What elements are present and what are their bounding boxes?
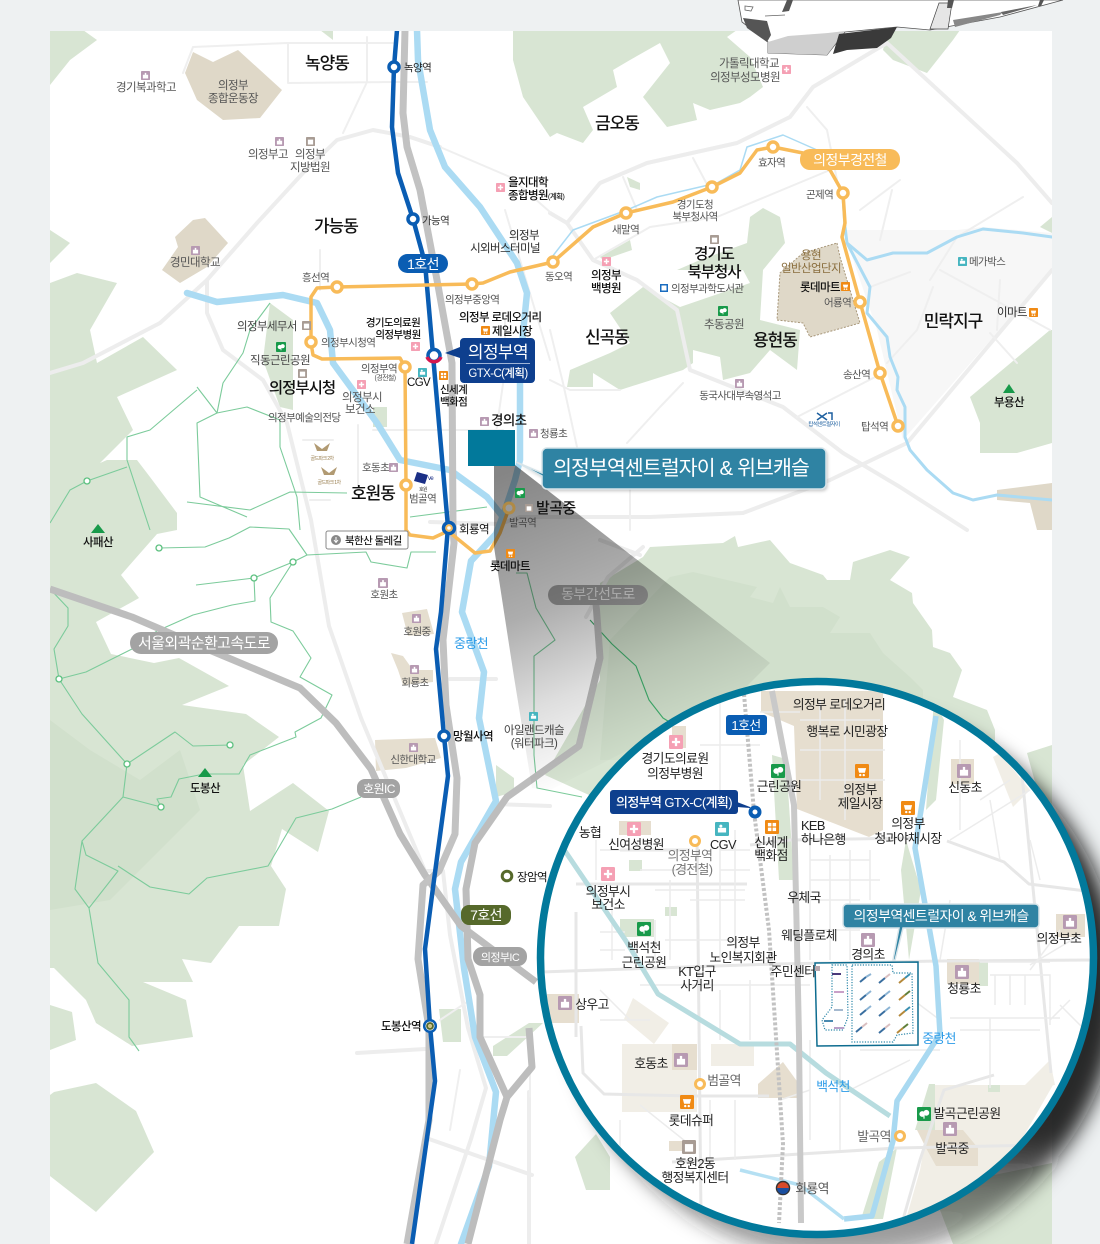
Megabox: 메가박스: [969, 256, 1006, 268]
district labels: 용현동: [753, 331, 797, 350]
highway: Dongbu expressway: [466, 603, 600, 1244]
Shinsegae department store: 백화점: [440, 395, 467, 408]
Lotte Castle 2: [311, 443, 334, 462]
Eulji hospital: [496, 175, 565, 202]
Uijeongbu IC badge: 의정부IC: [481, 951, 520, 964]
Fruit market: 의정부: [891, 816, 926, 831]
Hyoja station: 효자역: [758, 157, 785, 169]
trail junction markers: [56, 478, 296, 810]
light rail badge: [800, 149, 900, 170]
Jangam station label: 장암역: [517, 871, 547, 884]
hiking trails: [50, 303, 692, 1051]
Sangwoo high: [558, 996, 610, 1012]
Kyungmin University: [170, 246, 220, 269]
school and court: 의정부: [295, 148, 325, 161]
local roads: [183, 37, 1050, 1130]
Shinyeoseong hospital: 신여성병원: [608, 837, 664, 852]
darker forest shading: [50, 572, 923, 910]
Hoeryong station: [776, 1181, 829, 1196]
Shinsegae: 신세계: [754, 835, 788, 850]
Dong-o station: 동오역: [545, 271, 572, 283]
Jungnangcheon: 중랑천: [922, 1031, 956, 1046]
Line 7 badge: [461, 905, 511, 925]
district labels: [269, 54, 983, 503]
provincial office station: [672, 198, 718, 223]
Eoryong station: 어룡역: [824, 297, 851, 309]
Dobongsan mountain: 도봉산: [190, 782, 221, 795]
Buyongsan: [994, 384, 1025, 409]
Island castle: [504, 712, 564, 750]
Howon IC badge: [357, 779, 400, 798]
KT junction: [678, 964, 717, 993]
Shinsegae: 백화점: [754, 848, 788, 863]
district labels: 신곡동: [585, 328, 629, 347]
public health center: 의정부시: [342, 391, 382, 404]
Hodong school: 호동초: [362, 462, 390, 474]
Uijeongbu school: 의정부초: [1037, 931, 1082, 946]
Uijeongbu station light rail: 의정부역: [361, 363, 397, 375]
Bukhansan trail badge: [326, 531, 408, 549]
KEB: 하나은행: [801, 832, 846, 847]
Buyongsan: 부용산: [994, 396, 1025, 409]
Uijeongbu light rail orange: [311, 147, 898, 553]
provincial office station: 경기도청: [677, 198, 713, 211]
Line 1 badge: 1호선: [731, 718, 761, 733]
Jeil market: 제일시장: [838, 796, 883, 811]
Gyeonggi medical center: 경기도의료원: [641, 751, 709, 766]
Fruit market: 청과야채시장: [874, 831, 942, 846]
Lotte mart south: [490, 549, 531, 573]
Shinhan University: 신한대학교: [390, 754, 437, 766]
Uijeongbu station light rail: 의정부역: [668, 848, 712, 863]
Yonghyun industrial: 일반산업단지: [781, 261, 841, 275]
Chudong park: [704, 306, 744, 331]
highway: Seoul ring expressway: [50, 589, 536, 982]
city hall station: 의정부시청역: [321, 337, 375, 349]
Cheongnyong school: 청룡초: [540, 428, 568, 440]
Saemal station: 새말역: [612, 224, 639, 236]
Cheongnyong school: [529, 428, 568, 440]
CGV: CGV: [710, 837, 737, 852]
Minrak district pale area: [852, 237, 1040, 290]
site callout in circle: [843, 904, 1039, 960]
GTX callout: GTX-C(계획): [468, 366, 528, 380]
Catholic university hospital: 가톨릭대학교: [719, 57, 779, 70]
Shinyeoseong hospital: [608, 822, 664, 852]
stream: Baekseokcheon: [187, 293, 503, 517]
Beomgol station: 범골역: [707, 1073, 741, 1088]
ring expressway badge: [130, 632, 278, 654]
main road: [772, 691, 801, 1223]
health center: 보건소: [591, 897, 626, 912]
KEB: KEB: [801, 818, 825, 833]
health center: 의정부시: [586, 884, 630, 899]
district labels: 민락지구: [924, 312, 983, 331]
district labels: 북부청사: [687, 263, 741, 281]
Line 1 badge: [726, 715, 767, 735]
bus terminal: 의정부: [509, 229, 539, 242]
district labels: 가능동: [314, 217, 358, 236]
Lotte Castle 1: [318, 467, 341, 486]
stream: Jungnangcheon: [417, 30, 527, 1244]
Chudong park: 추동공원: [704, 317, 744, 331]
Jungnangcheon label: 중랑천: [454, 636, 488, 651]
Rodeo street and Jeil market: 제일시장: [492, 324, 533, 338]
Catholic university hospital: [710, 57, 791, 84]
Hoewon school: 호원초: [370, 589, 399, 601]
Line 1 badge: [398, 254, 448, 273]
post office: 우체국: [787, 890, 822, 905]
CGV: CGV: [407, 377, 431, 389]
bus terminal: [470, 229, 540, 255]
bus terminal: 시외버스터미널: [470, 242, 540, 255]
park Balgok icon: [515, 488, 525, 498]
community office: 호원2동: [675, 1156, 716, 1171]
forest fragments: [620, 711, 1000, 1219]
Balgok station: 발곡역: [857, 1129, 891, 1144]
Gyeonggi medical center: 경기도의료원: [366, 316, 420, 329]
district labels: 녹양동: [305, 54, 349, 73]
Hoewon middle: 호원중: [403, 626, 432, 638]
tan urban areas: [162, 50, 1052, 771]
Uijeongbu station light rail: [361, 363, 397, 382]
Yonghyun industrial: [781, 249, 841, 275]
minor street grid: [596, 700, 1090, 1160]
Gyeonggi medical center: [366, 316, 421, 351]
Hodong school: 호동초: [634, 1056, 669, 1071]
community center: 주민센터: [771, 964, 815, 979]
Gonje station: 곤제역: [806, 189, 833, 201]
GTX callout: 의정부역: [468, 343, 528, 362]
Lotte Castle 2: 골드파크 2차: [311, 455, 334, 462]
Yonghyun industrial complex: [777, 243, 860, 337]
wedding: 웨딩플로체: [781, 928, 837, 943]
hospital icon and Baek hospital: 의정부: [591, 269, 622, 282]
Lotte mart: [800, 280, 850, 294]
tax office: 의정부세무서: [237, 320, 297, 333]
GTX-C label: 의정부역 GTX-C(계획): [616, 795, 732, 810]
Shinsegae: [754, 820, 788, 863]
light rail badge: 의정부경전철: [813, 152, 887, 168]
tan blocks: [547, 691, 1085, 1166]
Dongguk attached school: [699, 379, 782, 402]
stations: line 1: [389, 62, 454, 741]
sports complex: 의정부: [218, 79, 248, 92]
We've logo: ve: [428, 476, 434, 482]
Hoeryong school: 회룡초: [401, 677, 430, 689]
community office: 행정복지센터: [661, 1170, 729, 1185]
sports complex: [208, 79, 259, 105]
provincial office icon: [710, 235, 719, 244]
school and court: 지방법원: [290, 160, 330, 174]
Rodeo street and Jeil market: 의정부 로데오거리: [459, 310, 541, 324]
Jeil market: [838, 764, 883, 811]
park Jikdong: [250, 342, 310, 378]
site callout: 의정부역센트럴자이 & 위브캐슬: [553, 457, 809, 480]
Sapaesan: 사패산: [83, 535, 114, 549]
We've logo: [414, 472, 434, 493]
Emart: [997, 306, 1038, 319]
apartments and local labels centre-west: [83, 149, 900, 1033]
Uijeongbu station light rail: [668, 836, 713, 877]
Sangwoo high: 상우고: [575, 997, 610, 1012]
station: Hoeryong inner: [446, 525, 452, 531]
station: Uijeongbu GTX: [427, 350, 441, 362]
senior center: 의정부: [726, 935, 761, 950]
panel: zoomed neighbourhood circle: [539, 680, 1095, 1240]
We've logo: 호원: [419, 486, 428, 493]
Baekseokcheon park: [622, 922, 666, 970]
Dongguk attached school: 동국사대부속영석고: [699, 390, 782, 402]
Uijeongbu school: [1037, 915, 1082, 946]
Gyeongui school: 경의초: [491, 413, 527, 428]
Baekseokcheon park: 근린공원: [622, 955, 666, 970]
hospital icon and Baek hospital: 백병원: [591, 281, 621, 295]
senior center: 노인복지회관: [709, 950, 777, 965]
Howon IC badge: 호원IC: [363, 782, 396, 796]
public health center: [342, 380, 382, 416]
Mangwolsa station: 망월사역: [453, 730, 493, 743]
Dobongsan mountain: [190, 768, 221, 795]
ring expressway badge: 서울외곽순환고속도로: [138, 635, 271, 652]
Hodong school: [634, 1053, 688, 1071]
Nokyang station label: 녹양역: [404, 62, 431, 74]
Gyeongbuk college: [116, 71, 176, 94]
thin streams: [552, 135, 817, 257]
Sindong school: [948, 764, 983, 795]
district labels: 금오동: [595, 114, 639, 133]
train illustration: [738, 0, 1063, 55]
Emart: 이마트: [997, 306, 1027, 319]
community office: [661, 1140, 729, 1185]
Jeil market: 의정부: [843, 782, 878, 797]
Gyeongbuk college: 경기북과학고: [116, 80, 176, 94]
GTX-C label: [610, 790, 750, 814]
Tapseok station: 탑석역: [861, 421, 888, 433]
district labels: 호원동: [351, 484, 395, 503]
site plan box: [815, 962, 918, 1046]
Cheongnyong school: [947, 965, 982, 996]
Lotte mart: 롯데마트: [800, 280, 841, 294]
railway corridor: [744, 694, 783, 1223]
Ganeung station: 가능역: [422, 215, 449, 227]
CGV: [407, 368, 431, 389]
Shinhan University: [390, 743, 437, 766]
school and court: 의정부고: [248, 148, 288, 161]
Bukhansan trail badge: 북한산 둘레길: [345, 534, 402, 547]
Line 7 badge: 7호선: [470, 907, 502, 923]
station: Dobongsan: [424, 1020, 436, 1032]
provincial office station: 북부청사역: [672, 211, 718, 223]
Shinsegae department store: [439, 371, 467, 408]
Dongbu expressway badge: [548, 585, 648, 605]
GTX callout: [445, 338, 535, 383]
health center: [586, 867, 630, 912]
cone from site to circle: [494, 465, 770, 790]
Eulji hospital: 을지대학: [508, 175, 549, 189]
Lotte Castle 1: 골드파크 1차: [318, 479, 341, 486]
Songsan station: 송산역: [843, 369, 870, 381]
Hoewon middle: [403, 614, 432, 638]
district labels: 경기도: [694, 245, 735, 263]
Jungang station: 의정부중앙역: [445, 294, 499, 306]
Lotte super: [669, 1095, 713, 1128]
Beomgol station: 범골역: [409, 493, 436, 505]
Hoewon school: [370, 578, 399, 601]
stations: light rail: [306, 142, 903, 490]
Lotte mart south: 롯데마트: [490, 559, 531, 573]
Gyeonggi medical center: 의정부병원: [647, 766, 703, 781]
stream lower: [740, 1170, 844, 1219]
stream: Minrak: [843, 197, 1052, 500]
KEB: [801, 818, 846, 847]
Park: 근린공원: [757, 779, 801, 794]
Balgok park: 발곡근린공원: [933, 1106, 1001, 1121]
park Jikdong: 직동근린공원: [250, 353, 310, 367]
Baekseokcheon label: 백석천: [816, 1079, 850, 1094]
Balgok station label: 발곡역: [509, 517, 536, 529]
Happiness plaza: 행복로 시민광장: [806, 724, 888, 739]
line 1 blue: [392, 30, 448, 1244]
KT junction: KT입구: [678, 964, 717, 979]
Gyeonggi medical center: [641, 735, 709, 781]
Gyeongui school: [851, 933, 886, 962]
art center: 의정부예술의전당: [268, 411, 341, 424]
station: Jangam: [502, 871, 512, 881]
Tapseok centre logo: [808, 413, 840, 428]
science library: 의정부과학도서관: [671, 283, 744, 295]
Park: [757, 764, 801, 794]
Cheongnyong school: 청룡초: [947, 981, 982, 996]
Rodeo street and Jeil market: [459, 310, 541, 338]
Gyeonggi medical center: 의정부병원: [375, 328, 421, 341]
sports complex: 종합운동장: [208, 92, 259, 105]
Balgok middle: [935, 1122, 970, 1156]
Line 1 badge: 1호선: [407, 256, 439, 272]
Fruit market: [874, 801, 942, 846]
Catholic university hospital: 의정부성모병원: [710, 70, 780, 84]
KT junction: 사거리: [680, 978, 714, 993]
Kyungmin University: 경민대학교: [170, 255, 220, 269]
Hoeryong station: 회룡역: [795, 1181, 829, 1196]
Dongbu expressway badge: 동부간선도로: [561, 586, 636, 602]
site marker square: [468, 430, 515, 466]
Tapseok centre logo: 탑석센트럴자이: [808, 420, 840, 428]
public health center: 보건소: [345, 403, 375, 416]
Island castle: (워터파크): [511, 737, 558, 750]
light tan zones: [622, 753, 1055, 1240]
main streets: [544, 777, 1090, 1217]
site callout in circle: 의정부역센트럴자이 & 위브캐슬: [854, 908, 1029, 924]
CGV: [710, 822, 737, 852]
stream big: [844, 716, 940, 1219]
place labels north: [116, 57, 1038, 440]
site callout: [516, 448, 828, 491]
Yonghyun industrial: 용현: [801, 249, 821, 262]
panel: zoomed circle shadow: [567, 708, 1100, 1244]
Uijeongbu IC badge: [473, 947, 527, 966]
Balgok middle: 발곡중: [935, 1141, 970, 1156]
stream Baekseokcheon: [565, 851, 890, 1116]
Shinsegae department store: 신세계: [440, 383, 467, 396]
senior center: [709, 935, 777, 965]
Nonghyup: 농협: [579, 825, 601, 840]
Balgok middle school: 발곡중: [536, 500, 576, 517]
Hoeryong station label: 회룡역: [459, 523, 489, 536]
Sapaesan: [83, 524, 114, 549]
Lotte super: 롯데슈퍼: [669, 1113, 713, 1128]
station: Balgok: [504, 503, 514, 513]
Uijeongbu station light rail: (경전철): [375, 373, 396, 382]
GTX station marker: [750, 808, 760, 816]
rail corridor gray: [403, 30, 457, 1244]
Island castle: 아일랜드캐슬: [504, 723, 564, 737]
Gyeongui school: 경의초: [851, 947, 886, 962]
circle border: [540, 682, 1094, 1234]
school and court: [248, 137, 330, 174]
Heungseon station: 흥선역: [302, 271, 329, 284]
Dobongsan station label: 도봉산역: [381, 1020, 421, 1033]
Sindong school: 신동초: [948, 780, 983, 795]
Rodeo street: 의정부 로데오거리: [793, 697, 885, 712]
Uijeongbu station light rail: (경전철): [672, 862, 713, 877]
Baekseokcheon park: 백석천: [627, 940, 661, 955]
hospital icon and Baek hospital: [591, 257, 622, 295]
Eulji hospital: 종합병원(계획): [508, 188, 565, 202]
Hoeryong school: [401, 665, 430, 689]
district labels: 의정부시청: [269, 379, 335, 397]
